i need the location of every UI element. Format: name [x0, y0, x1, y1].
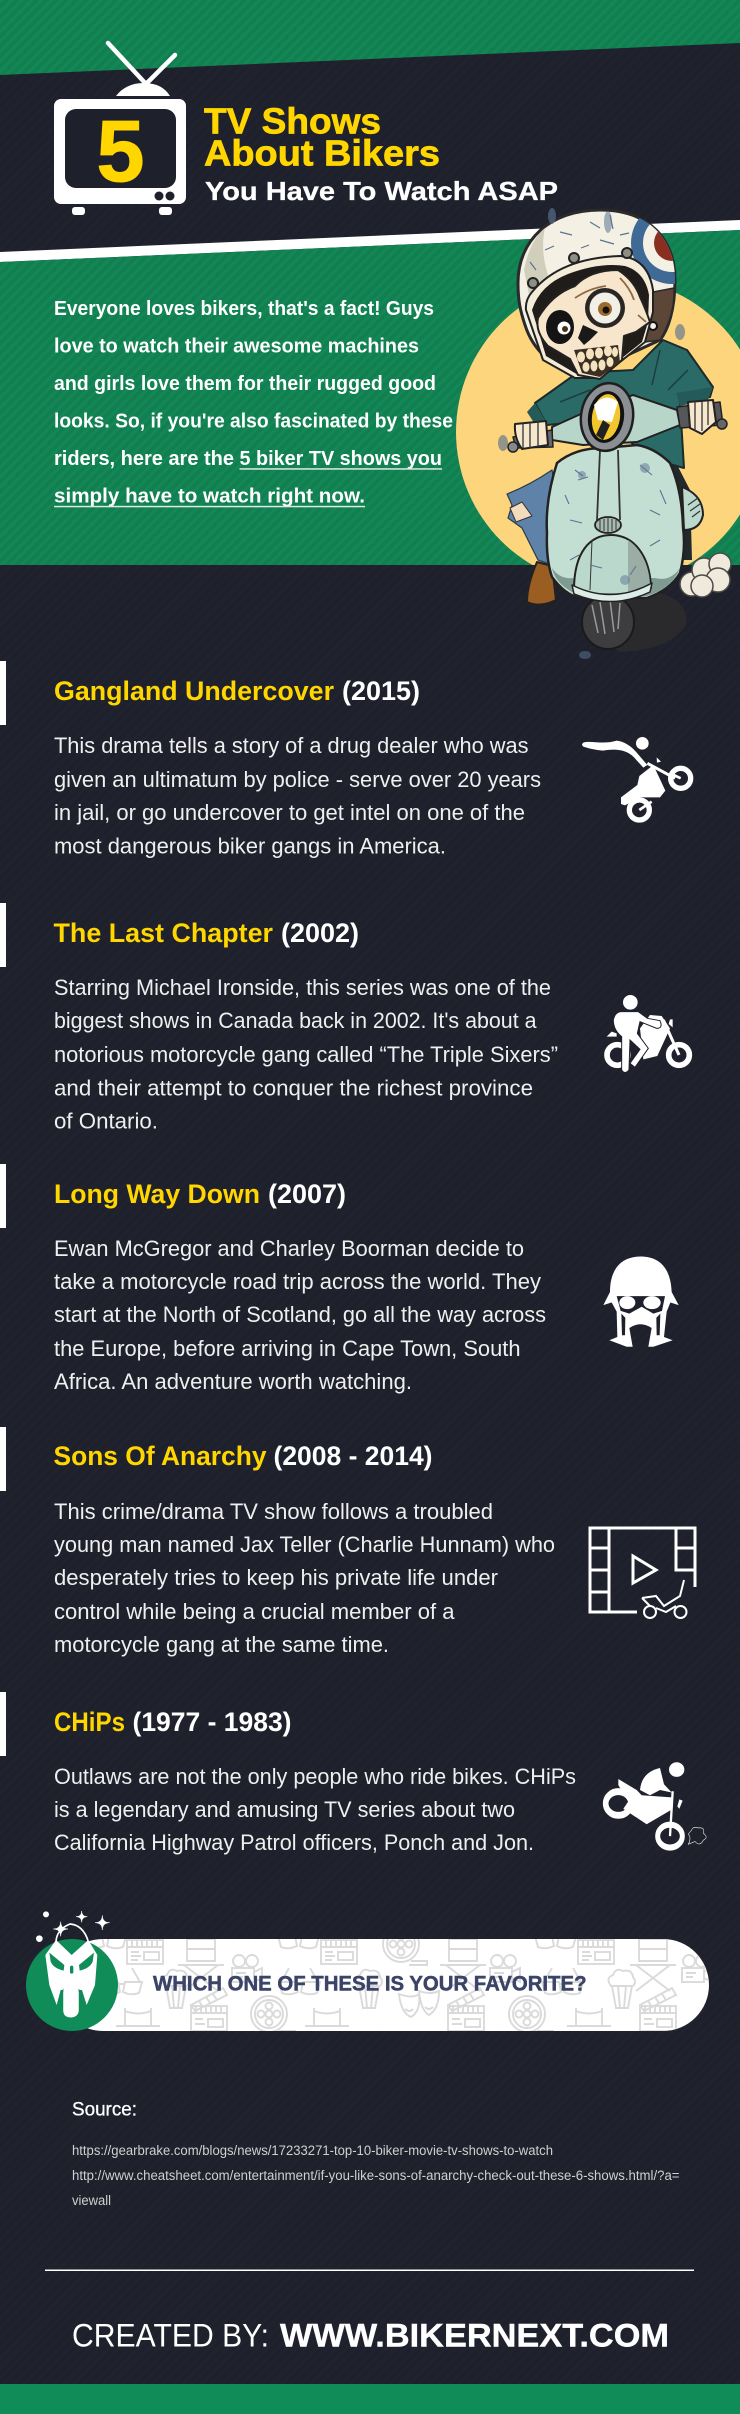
body text: Starring Michael Ironside, this series was one of the — [54, 975, 551, 1000]
body text: take a motorcycle road trip across the world. They — [54, 1269, 542, 1294]
body text: is a legendary and amusing TV series about two — [54, 1797, 515, 1822]
boot — [527, 562, 556, 605]
body text: This drama tells a story of a drug dealer who was — [54, 733, 528, 758]
leg shield — [547, 445, 684, 598]
title: TV Shows — [204, 100, 381, 142]
body text: of Ontario. — [54, 1108, 158, 1134]
helmet roundel — [631, 218, 675, 284]
white diagonal stripe — [0, 220, 740, 262]
heading: Long Way Down — [54, 1179, 260, 1209]
source block: https://gearbrake.com/blogs/news/17233271-top-10-biker-movie-tv-shows-to-watch — [72, 2143, 553, 2158]
skull teeth — [574, 345, 620, 377]
body text: control while being a crucial member of a — [54, 1599, 455, 1624]
helmet side brown piece — [645, 288, 674, 342]
icon: television with number 5 — [54, 43, 186, 215]
body text: most dangerous biker gangs in America. — [54, 834, 446, 858]
yellow circle behind rider — [456, 292, 740, 565]
hands — [515, 421, 548, 449]
icon: stunt motorcycle — [582, 737, 691, 820]
body text: Africa. An adventure worth watching. — [54, 1369, 412, 1394]
body text: the Europe, before arriving in Cape Town, South — [54, 1336, 520, 1361]
wear marks — [565, 465, 666, 575]
icon: person leaning on motorcycle — [607, 995, 689, 1072]
body text: young man named Jax Teller (Charlie Hunnam) who — [54, 1532, 555, 1557]
grille — [595, 517, 621, 533]
illustration: skeleton rider on scooter — [498, 202, 731, 659]
heading: (2007) — [268, 1179, 346, 1209]
body text: motorcycle gang at the same time. — [54, 1632, 389, 1657]
body text: and their attempt to conquer the richest province — [54, 1076, 533, 1100]
road shadow — [600, 590, 686, 652]
exhaust smoke puff — [680, 553, 731, 597]
heading: Sons Of Anarchy — [54, 1441, 267, 1471]
source block: viewall — [72, 2193, 111, 2208]
intro text: simply have to watch right now. — [54, 486, 365, 508]
footer green bar — [0, 2384, 740, 2414]
body text: This crime/drama TV show follows a troubled — [54, 1499, 493, 1524]
section: CHiPs — [0, 1692, 706, 1855]
heading — [54, 1441, 432, 1471]
helmet rivets — [528, 248, 632, 288]
helmet side shade — [524, 228, 548, 300]
credit line: CREATED BY: — [72, 2318, 269, 2354]
section: Long Way Down — [0, 1164, 679, 1394]
credit line — [72, 2318, 669, 2354]
heading — [54, 1707, 292, 1737]
skull left socket — [546, 310, 574, 344]
heading: (1977 - 1983) — [132, 1707, 292, 1737]
back pants and side panel — [672, 455, 692, 560]
marker bar — [0, 1427, 6, 1491]
intro text: 5 biker TV shows you — [240, 448, 442, 470]
skull nose — [578, 325, 598, 345]
heading: (2008 - 2014) — [274, 1441, 432, 1471]
heading: Gangland Undercover — [54, 676, 334, 706]
body text: Ewan McGregor and Charley Boorman decide to — [54, 1236, 524, 1261]
icon: film strip with motorcycle — [590, 1528, 695, 1618]
intro text — [54, 298, 453, 508]
section: Gangland Undercover — [0, 661, 691, 858]
marker bar — [0, 903, 6, 967]
credit line: WWW.BIKERNEXT.COM — [280, 2318, 669, 2354]
icon: motorcycle wheelie — [606, 1762, 706, 1848]
heading: CHiPs — [54, 1707, 125, 1737]
header top green band — [0, 0, 740, 75]
body text: Outlaws are not the only people who ride bikes. CHiPs — [54, 1764, 576, 1789]
handlebar body — [552, 395, 680, 445]
panel: intro green band — [0, 230, 740, 565]
body text: given an ultimatum by police - serve over 20 years — [54, 767, 541, 792]
intro text: and girls love them for their rugged good — [54, 373, 436, 395]
headlight — [577, 380, 637, 454]
title — [204, 100, 558, 206]
marker bar — [0, 1692, 6, 1756]
banner white pill — [57, 1939, 709, 2031]
source block — [72, 2100, 680, 2208]
section: Sons Of Anarchy — [0, 1427, 695, 1657]
helmet rim and visor opening — [526, 256, 653, 378]
icon: biker head with helmet — [603, 1257, 679, 1347]
banner film icon pattern — [98, 1939, 709, 2031]
skull right eye — [585, 288, 625, 328]
helmet scratches — [530, 215, 629, 270]
marker bar — [0, 1164, 6, 1228]
source block: Source: — [72, 2100, 137, 2121]
body text: in jail, or go undercover to get intel on one of the — [54, 800, 525, 825]
marker bar — [0, 661, 6, 725]
divider — [45, 2270, 694, 2271]
body text — [54, 975, 558, 1134]
intro text: looks. So, if you're also fascinated by these — [54, 411, 453, 433]
banner: which one is your favorite — [26, 1911, 712, 2035]
front fender — [574, 535, 651, 595]
icon: green badge with motorcycle front — [26, 1911, 118, 2031]
intro text: Everyone loves bikers, that's a fact! Guys — [54, 298, 434, 320]
skull — [537, 270, 650, 379]
heading: (2015) — [342, 676, 420, 706]
section: The Last Chapter — [0, 903, 689, 1134]
banner question text: WHICH ONE OF THESE IS YOUR FAVORITE? — [153, 1972, 586, 1996]
intro text: love to watch their awesome machines — [54, 336, 419, 358]
paint splatter — [675, 324, 685, 340]
title: You Have To Watch ASAP — [205, 176, 558, 206]
sweater — [535, 340, 713, 468]
wheel — [582, 595, 634, 649]
heading: (2002) — [281, 918, 359, 948]
body text: notorious motorcycle gang called “The Triple Sixers” — [54, 1042, 558, 1067]
exposed bone — [510, 502, 532, 522]
heading: The Last Chapter — [54, 918, 273, 948]
grips — [677, 402, 723, 428]
body text — [54, 1764, 576, 1855]
body text: desperately tries to keep his private life under — [54, 1565, 498, 1590]
icon: television with number 5: 5 — [96, 103, 144, 200]
source block: http://www.cheatsheet.com/entertainment/if-you-like-sons-of-anarchy-check-out-these-6-shows.html/?a= — [72, 2168, 680, 2183]
torn jeans — [507, 470, 556, 565]
body text: California Highway Patrol officers, Ponch and Jon. — [54, 1830, 534, 1855]
helmet shell — [518, 210, 675, 377]
body text: biggest shows in Canada back in 2002. It's about a — [54, 1008, 537, 1033]
intro text: riders, here are the — [54, 448, 234, 470]
body text — [54, 1236, 546, 1394]
title: About Bikers — [204, 132, 440, 174]
body text: start at the North of Scotland, go all the way across — [54, 1302, 546, 1327]
body text — [54, 733, 541, 858]
body text — [54, 1499, 555, 1657]
